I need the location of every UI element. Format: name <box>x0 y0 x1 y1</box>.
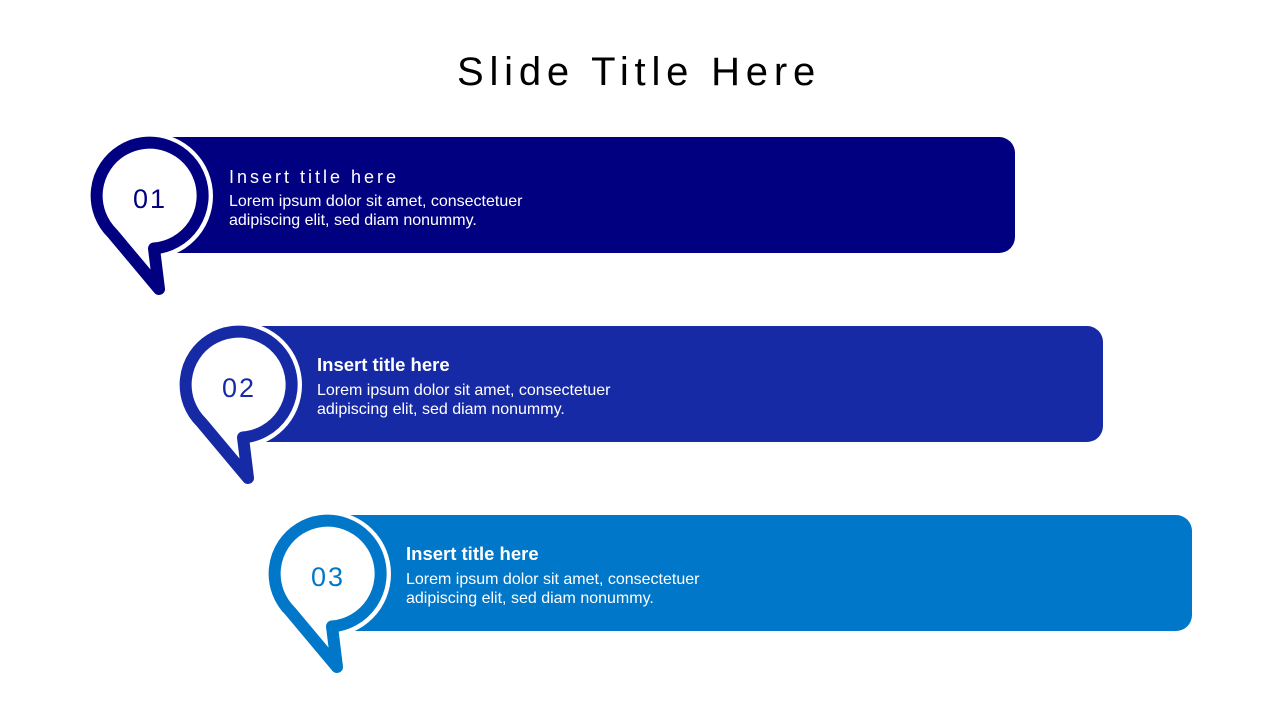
text 2: adipiscing elit, sed diam nonummy. <box>317 401 565 418</box>
bar 3 <box>328 515 1192 631</box>
pin 3 <box>265 511 391 667</box>
pin 2: 02 <box>222 373 256 403</box>
item 3 <box>265 511 1192 667</box>
bar 2 <box>239 326 1103 442</box>
text 2: Lorem ipsum dolor sit amet, consectetuer <box>317 382 611 399</box>
text 2: Insert title here <box>317 354 450 375</box>
text 1: Insert title here <box>229 167 399 187</box>
bar 1 <box>150 137 1015 253</box>
text 1: adipiscing elit, sed diam nonummy. <box>229 212 477 229</box>
title: Slide Title Here <box>457 50 821 94</box>
pin 2 <box>176 322 302 478</box>
text 3 <box>406 543 700 607</box>
text 3: adipiscing elit, sed diam nonummy. <box>406 590 654 607</box>
pin 1 <box>87 133 213 289</box>
text 1: Lorem ipsum dolor sit amet, consectetuer <box>229 193 523 210</box>
item 2 <box>176 322 1103 478</box>
text 2 <box>317 354 611 418</box>
text 1 <box>229 167 523 229</box>
item 1 <box>87 133 1015 289</box>
text 3: Insert title here <box>406 543 539 564</box>
pin 1: 01 <box>133 184 167 214</box>
pin 3: 03 <box>311 562 345 592</box>
text 3: Lorem ipsum dolor sit amet, consectetuer <box>406 571 700 588</box>
